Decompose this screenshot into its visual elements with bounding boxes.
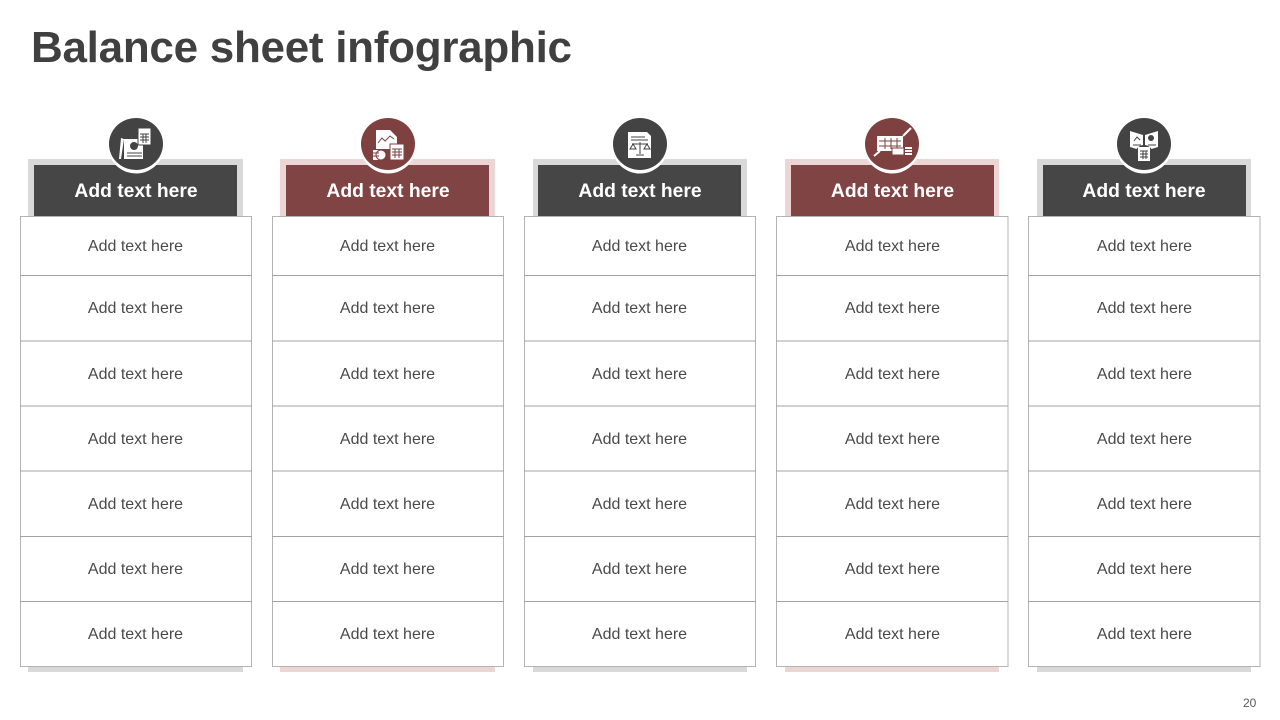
header backing xyxy=(1037,159,1251,672)
table: Add text here xyxy=(340,626,435,643)
table: Add text here xyxy=(1097,496,1192,513)
icon: calculator and ledger xyxy=(108,116,164,174)
header text: Add text here xyxy=(831,181,954,202)
table: Add text here xyxy=(88,431,183,448)
table: Add text here xyxy=(88,300,183,317)
header text: Add text here xyxy=(74,181,198,202)
table: Add text here xyxy=(88,366,183,383)
table xyxy=(776,216,1008,666)
icon: open book with calculator xyxy=(1116,116,1172,174)
title: Balance sheet infographic xyxy=(31,23,572,72)
header bar xyxy=(286,165,489,217)
header bar xyxy=(34,165,237,217)
table: Add text here xyxy=(1097,626,1192,643)
icon: market board with cash xyxy=(864,116,920,174)
table xyxy=(1028,216,1260,666)
table: Add text here xyxy=(845,238,940,255)
table: Add text here xyxy=(1097,238,1192,255)
table: Add text here xyxy=(1097,431,1192,448)
table: Add text here xyxy=(88,238,183,255)
panel: column 3 xyxy=(524,116,756,672)
panel: column 1 xyxy=(20,116,252,672)
header text: Add text here xyxy=(326,181,450,202)
header text: Add text here xyxy=(578,181,702,202)
table: Add text here xyxy=(592,496,687,513)
table: Add text here xyxy=(88,561,183,578)
table: Add text here xyxy=(340,238,435,255)
table: Add text here xyxy=(1097,300,1192,317)
table xyxy=(524,216,756,666)
header bar xyxy=(1043,165,1246,217)
table: Add text here xyxy=(845,300,940,317)
panel: column 2 xyxy=(272,116,504,672)
table: Add text here xyxy=(845,561,940,578)
table: Add text here xyxy=(1097,366,1192,383)
page number: 20 xyxy=(1243,696,1257,710)
table: Add text here xyxy=(845,496,940,513)
table: Add text here xyxy=(845,626,940,643)
table: Add text here xyxy=(340,366,435,383)
table: Add text here xyxy=(340,431,435,448)
panel: column 4 xyxy=(776,116,1008,672)
table: Add text here xyxy=(592,626,687,643)
table: Add text here xyxy=(340,496,435,513)
table xyxy=(20,216,252,666)
table: Add text here xyxy=(592,238,687,255)
header bar xyxy=(791,165,994,217)
panel: column 5 xyxy=(1028,116,1260,672)
header text: Add text here xyxy=(1082,181,1206,202)
header bar xyxy=(538,165,741,217)
header backing xyxy=(533,159,747,672)
table: Add text here xyxy=(340,300,435,317)
table: Add text here xyxy=(592,431,687,448)
header backing xyxy=(280,159,495,672)
icon: financial report xyxy=(360,116,416,174)
table: Add text here xyxy=(592,300,687,317)
table: Add text here xyxy=(845,431,940,448)
table xyxy=(272,216,504,666)
header backing xyxy=(28,159,243,672)
header backing xyxy=(785,159,999,672)
table: Add text here xyxy=(88,626,183,643)
table: Add text here xyxy=(845,366,940,383)
table: Add text here xyxy=(88,496,183,513)
icon: legal document with scales xyxy=(612,116,668,174)
table: Add text here xyxy=(592,366,687,383)
table: Add text here xyxy=(1097,561,1192,578)
table: Add text here xyxy=(340,561,435,578)
table: Add text here xyxy=(592,561,687,578)
